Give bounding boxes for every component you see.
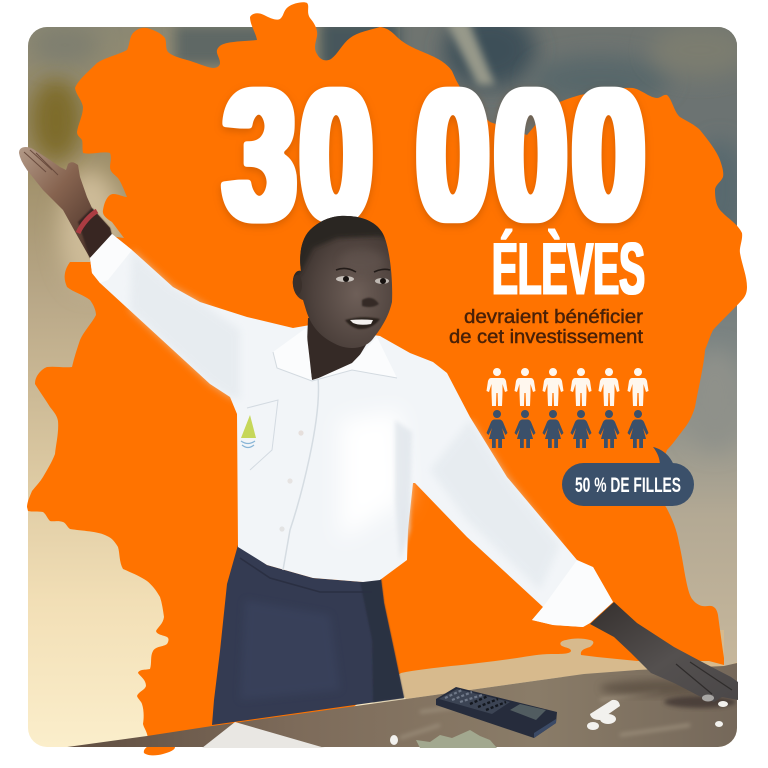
description text [449, 307, 644, 348]
description text: de cet investissement [449, 327, 644, 348]
crumpled green cloth [416, 730, 497, 748]
description text: devraient bénéficier [464, 307, 644, 328]
raised left arm and hand [19, 147, 112, 258]
white shirt [90, 234, 613, 627]
shirt collar [273, 328, 397, 381]
sand coast strip [396, 630, 737, 699]
pictogram row: boys [486, 368, 648, 406]
callout: 50 % de filles: 50 % DE FILLES [575, 474, 681, 497]
pictogram row: girls [486, 410, 648, 448]
neck [307, 318, 372, 380]
calculator [436, 687, 557, 738]
paper on table [202, 722, 325, 748]
headline number: 30 000 [224, 51, 645, 258]
table [60, 663, 737, 748]
school badge [241, 415, 256, 448]
chalk pieces [390, 700, 728, 745]
head [292, 216, 392, 348]
skirt [212, 545, 404, 725]
callout: 50 % de filles [562, 447, 694, 506]
right forearm and hand [590, 602, 738, 702]
